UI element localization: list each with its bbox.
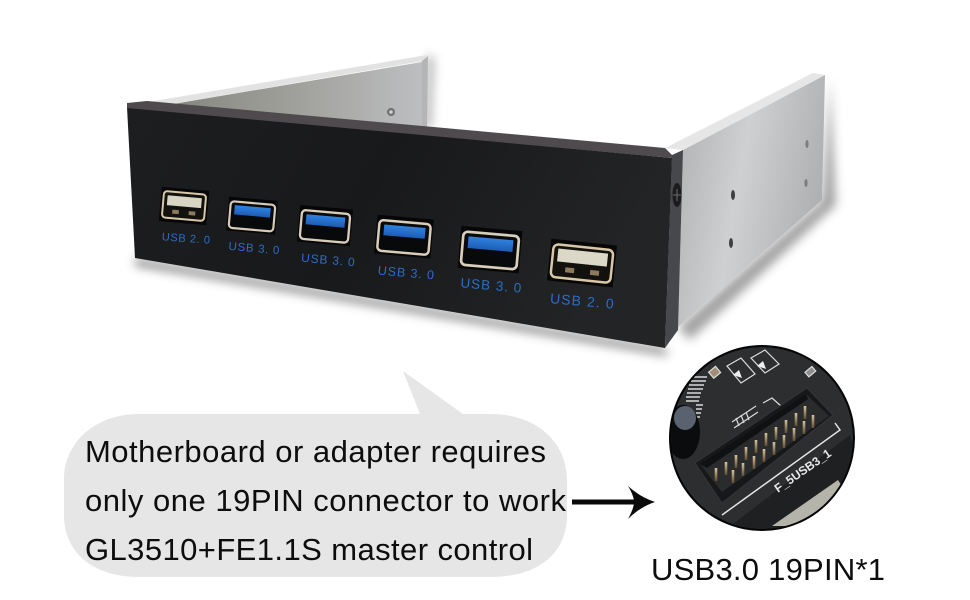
- capacitor: [671, 405, 700, 459]
- panel side edge: [665, 150, 683, 348]
- USB 2.0 port 6: [547, 239, 617, 287]
- board background: [671, 347, 853, 529]
- panel top edge: [127, 101, 672, 158]
- USB 3.0 port 2: [226, 197, 278, 235]
- USB 2.0 port 1: [159, 187, 209, 225]
- line 2: only one 19PIN connector to work: [85, 483, 566, 518]
- board corner: [772, 480, 843, 526]
- callout text: [85, 434, 566, 567]
- bubble shape: [64, 371, 567, 577]
- connector well: [700, 394, 829, 492]
- port labels: [161, 231, 615, 312]
- top components: [709, 350, 816, 428]
- label 6: USB 2. 0: [549, 290, 615, 312]
- USB 3.0 port 5: [458, 226, 522, 273]
- silk stripes: [686, 377, 707, 417]
- gold pins row 1: [715, 406, 806, 481]
- label 2: USB 3. 0: [228, 241, 280, 257]
- shadow under the panel: [135, 55, 836, 356]
- silkscreen label: F_5USB3_1: [772, 446, 834, 495]
- circular photo: 19-pin motherboard header: [666, 345, 860, 535]
- line 1: Motherboard or adapter requires: [85, 434, 546, 469]
- label 3: USB 3. 0: [301, 251, 356, 269]
- speech bubble callout: [64, 371, 567, 577]
- product photo: USB front panel bay: [127, 55, 836, 356]
- USB 3.0 port 4: [374, 215, 434, 258]
- silkscreen outline: [722, 423, 840, 515]
- connector caption: USB3.0 19PIN*1: [651, 552, 885, 587]
- right metal plate: [665, 73, 825, 327]
- label 1: USB 2. 0: [161, 231, 211, 247]
- lower board band: [733, 435, 852, 529]
- black front panel: [127, 107, 672, 348]
- line 3: GL3510+FE1.1S master control: [85, 532, 533, 567]
- USB 3.0 port 3: [297, 205, 353, 246]
- left rear metal plate: [148, 55, 665, 154]
- connector housing: [695, 388, 833, 503]
- label 5: USB 3. 0: [460, 275, 523, 296]
- gold pins row 2: [732, 415, 814, 483]
- well front wall: [700, 394, 808, 468]
- arrow to connector: [572, 486, 655, 519]
- label 4: USB 3. 0: [377, 264, 435, 282]
